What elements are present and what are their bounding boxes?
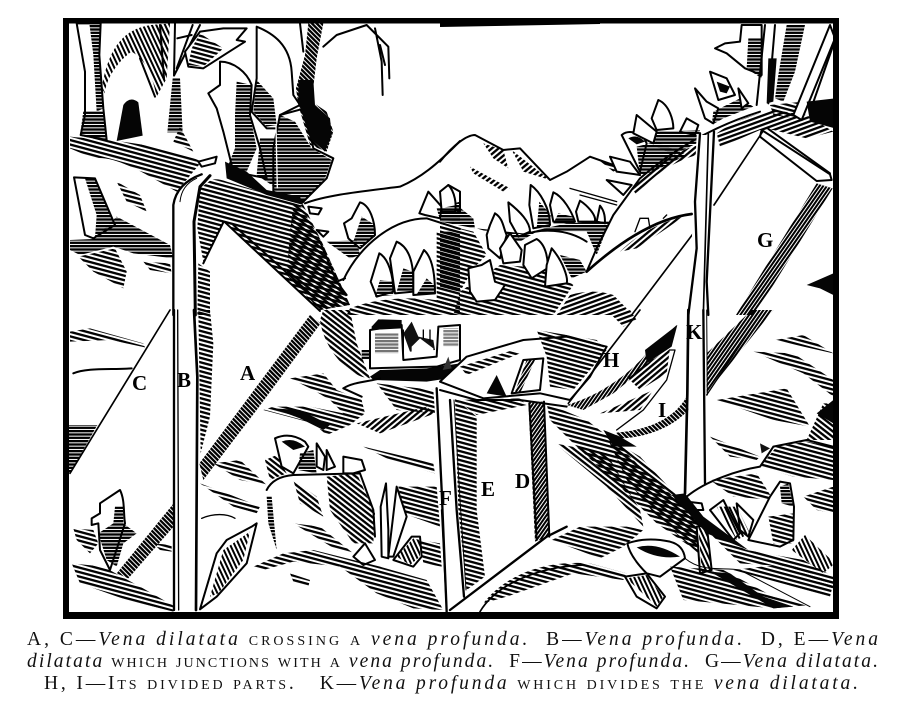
line of vena dilatata C bbox=[70, 310, 170, 473]
heavy woodcut frame bbox=[63, 18, 839, 619]
hillside below the band bbox=[547, 403, 703, 553]
white face A bbox=[203, 222, 320, 315]
hill crown above vein A bbox=[197, 179, 350, 310]
tall bush: middle lobe bbox=[252, 27, 300, 128]
leaf at the bottom bbox=[625, 573, 665, 608]
small rock ridge right bbox=[687, 440, 833, 513]
right tree trunk with branch bbox=[296, 23, 389, 152]
tree line behind the hill bbox=[440, 185, 610, 255]
edge strip of vein A bbox=[203, 222, 327, 311]
stump on the hill bbox=[622, 132, 687, 175]
line of vena dilatata H bbox=[568, 310, 640, 403]
foreground hatching bbox=[480, 527, 833, 612]
trunks at top right bbox=[757, 25, 835, 128]
stump on the right bbox=[748, 482, 794, 547]
hatching left of E bbox=[455, 398, 485, 590]
hill behind the town bbox=[343, 218, 460, 280]
hole in the ground bbox=[627, 540, 685, 577]
mountain ridge left bbox=[305, 141, 460, 203]
label B: B bbox=[177, 368, 191, 392]
caption bbox=[27, 629, 878, 694]
second tree trunk bbox=[167, 23, 200, 152]
label G: G bbox=[757, 228, 773, 252]
hatching on the right hills bbox=[710, 335, 833, 460]
left tree trunk bbox=[77, 23, 107, 142]
big hill outline bbox=[587, 102, 833, 272]
vena profunda F left lines bbox=[437, 388, 457, 613]
vena profunda K lower bbox=[685, 310, 707, 493]
foreground rock with wedge bbox=[440, 330, 607, 400]
label E: E bbox=[481, 477, 495, 501]
vena profunda B bbox=[174, 310, 197, 610]
label A: A bbox=[240, 361, 256, 385]
label F: F bbox=[439, 486, 452, 510]
small white leaf bbox=[198, 157, 217, 167]
dark hill below the town bbox=[320, 310, 370, 378]
dark stone bbox=[117, 100, 143, 141]
right vein lower part bbox=[707, 310, 773, 395]
lower hill and tree cluster bbox=[440, 213, 587, 315]
inner hill arc and tufts bbox=[587, 214, 692, 272]
small white leaf near K bbox=[687, 502, 703, 510]
woodcut scene: lower left bbox=[68, 310, 460, 613]
town buildings bbox=[362, 319, 460, 368]
label H: H bbox=[603, 348, 619, 372]
hatching right of the three trees bbox=[437, 232, 460, 312]
top edge of G bbox=[760, 129, 832, 181]
butterfly-shaped tree crown bbox=[715, 25, 762, 78]
edge line of H bbox=[632, 233, 693, 315]
hatched lower edge of G bbox=[736, 183, 833, 315]
hatched ground around grass bbox=[253, 540, 443, 610]
ledge above E and D bbox=[440, 390, 567, 415]
white space of the lower band bbox=[557, 292, 627, 315]
small leaves on the ridge bbox=[308, 207, 328, 237]
D vein band bbox=[528, 402, 549, 542]
divided band I bbox=[617, 397, 688, 438]
small tree lower left bbox=[73, 490, 137, 570]
F vein right lines bbox=[442, 400, 466, 610]
dark smudge on the right bbox=[807, 273, 833, 295]
rock with cut stump bbox=[265, 436, 375, 553]
bushes on the hill crown bbox=[633, 72, 753, 155]
hatched strip right of B bbox=[198, 310, 213, 453]
divided band H bbox=[567, 325, 677, 430]
tall bush: base bbox=[225, 108, 333, 205]
label I: I bbox=[658, 398, 666, 422]
lower vein of C bbox=[117, 502, 175, 578]
line from the hill to the top of G bbox=[714, 132, 763, 205]
hatched hill under vein A bbox=[200, 373, 365, 518]
tree stump bbox=[70, 177, 173, 288]
grass tuft bbox=[353, 483, 422, 567]
tall bush: left lobe bbox=[208, 62, 267, 178]
ground below the three trees bbox=[347, 298, 460, 315]
tree pair at the skyline bbox=[419, 185, 460, 222]
face of vena dilatata E bbox=[475, 403, 537, 577]
label C: C bbox=[132, 371, 147, 395]
small spire in front of town bbox=[443, 357, 452, 370]
label K: K bbox=[686, 320, 703, 344]
three trees on the hill bbox=[371, 242, 435, 297]
caption line 2: dilatata which junctions with a vena profunda. F—Vena profunda. G—Vena dilatata. bbox=[27, 651, 878, 672]
cliff edge bbox=[320, 242, 347, 295]
white face of vena dilatata G bbox=[713, 137, 830, 315]
caption line 3: H, I—Its divided parts. K—Vena profunda which divides the vena dilatata. bbox=[44, 673, 858, 694]
grass near the stump bbox=[697, 500, 835, 573]
vein B head bbox=[173, 172, 217, 315]
caption line 1: A, C—Vena dilatata crossing a vena profunda. B—Vena profunda. D, E—Vena bbox=[27, 629, 878, 650]
town ground bbox=[343, 363, 460, 397]
vena profunda K bbox=[688, 132, 714, 315]
woodcut scene: upper left bbox=[70, 23, 460, 315]
distant mountains bbox=[440, 135, 640, 205]
woodcut scene: upper right bbox=[440, 25, 835, 315]
label D: D bbox=[515, 469, 530, 493]
vena dilatata A band bbox=[199, 315, 321, 480]
leaf shape lower left bbox=[200, 523, 257, 609]
hatched shoulder beside vein B bbox=[197, 263, 210, 315]
leaves above the bush bbox=[185, 28, 247, 68]
vein letter labels bbox=[132, 228, 773, 510]
ground lower left bbox=[72, 543, 175, 612]
woodcut scene: lower right bbox=[440, 310, 835, 612]
arched foliage bbox=[102, 23, 170, 97]
dark ground right bbox=[672, 493, 833, 590]
lower hill line bbox=[450, 527, 567, 610]
lone small tree bbox=[327, 202, 375, 258]
hatching left of C bbox=[68, 328, 145, 473]
hatched slopes near the town bbox=[357, 383, 440, 527]
leaves at mountain edge bbox=[607, 157, 640, 195]
ground upper left bbox=[70, 137, 202, 212]
top hatch beside H bbox=[610, 310, 637, 327]
